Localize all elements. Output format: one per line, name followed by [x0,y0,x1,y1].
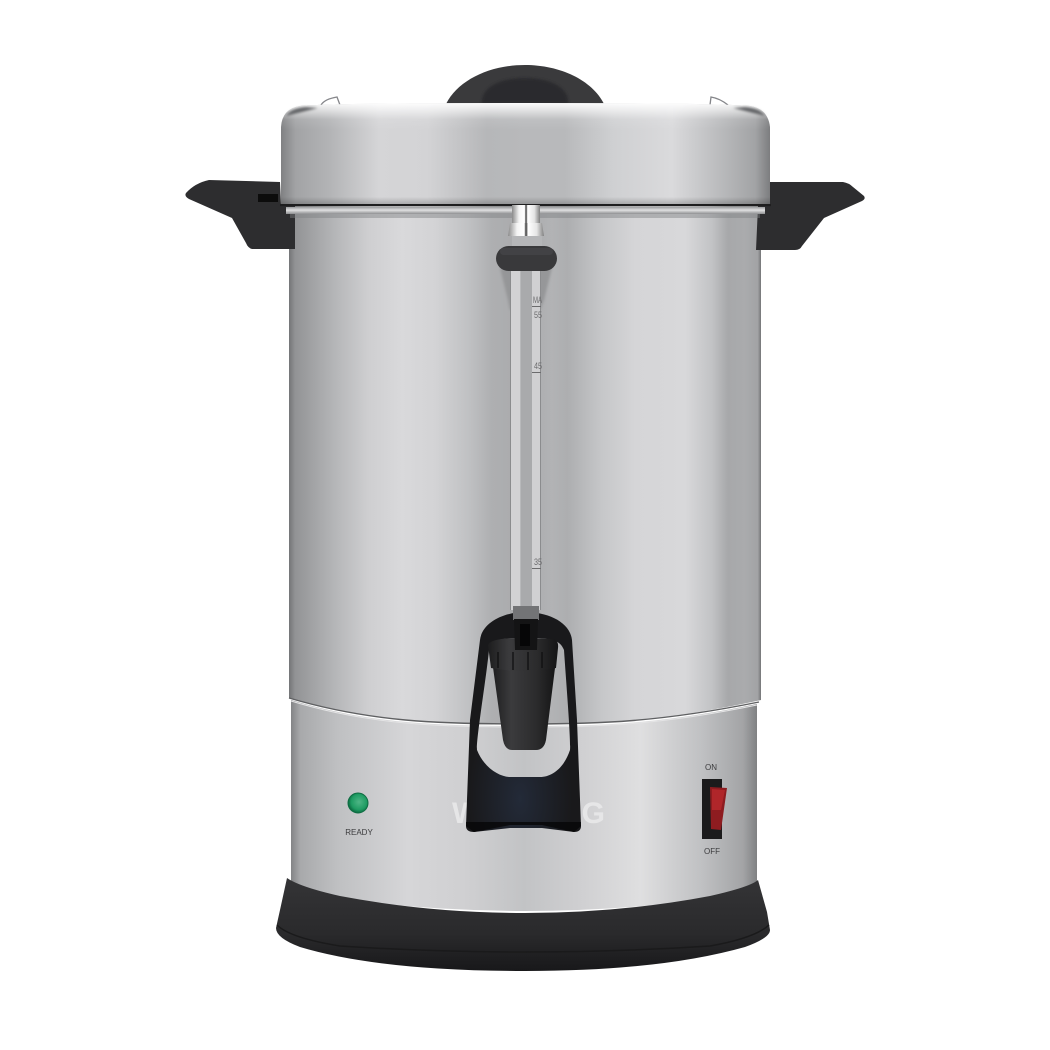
right handle [756,182,865,250]
spout stand [466,612,581,832]
lid [281,103,770,205]
chrome gauge fitting [508,205,544,247]
sight gauge tube [510,262,541,610]
logo on base: WARING [452,797,605,830]
lid rim band [280,204,771,218]
ready label: READY [345,828,373,837]
left handle [185,180,295,249]
gauge markings: 55 [534,310,542,320]
lid knob [446,65,604,104]
gauge markings: 35 [534,557,542,567]
lid clips [321,97,728,105]
ready indicator light [348,793,368,813]
gauge markings [532,295,542,569]
rubber foot [276,878,770,971]
upper body [289,205,761,724]
power rocker switch [702,779,727,839]
tube shadow [500,268,552,310]
spout tap [488,638,558,750]
gauge markings: MA [533,295,542,305]
on label: ON [705,763,717,772]
lower base shell [289,698,759,911]
gauge grommet [496,246,557,271]
spout connector [513,606,539,650]
gauge markings: 45 [534,361,542,371]
off label: OFF [704,847,720,856]
